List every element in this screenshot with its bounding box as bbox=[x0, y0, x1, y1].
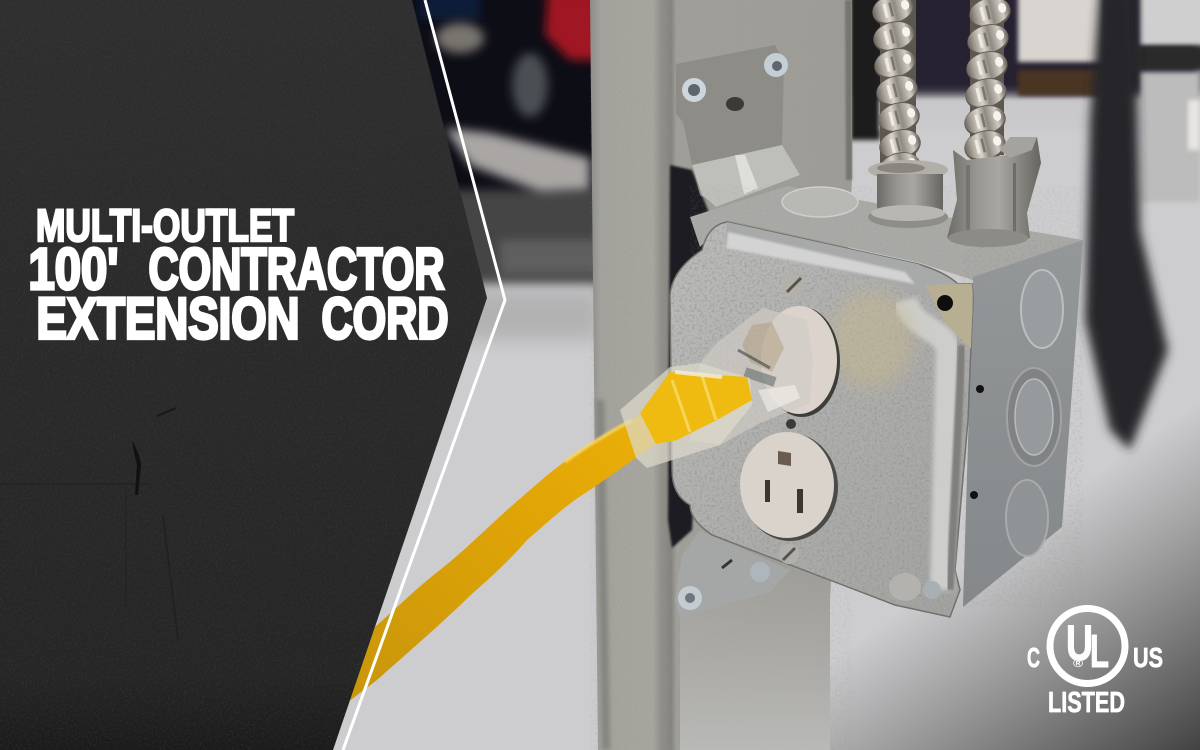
metal stud column bbox=[590, 0, 852, 750]
title text: CORD bbox=[322, 286, 448, 352]
junction box top face bbox=[690, 186, 1083, 280]
UL listed certification mark: LISTED bbox=[1048, 687, 1125, 719]
title text: CONTRACTOR bbox=[148, 237, 444, 302]
junction box side face with knockouts bbox=[963, 240, 1083, 607]
conduit connector, right bbox=[947, 137, 1041, 248]
UL listed certification mark: C bbox=[1027, 642, 1040, 673]
flexible metal conduit, left bbox=[869, 0, 924, 188]
title text: 100' bbox=[28, 237, 118, 302]
top mounting bracket bbox=[676, 45, 800, 207]
title text bbox=[28, 200, 448, 352]
dark title panel bbox=[0, 0, 500, 750]
conduit connector, left bbox=[868, 160, 948, 228]
UL listed certification mark: L bbox=[1090, 625, 1109, 677]
flexible metal conduit, right bbox=[961, 0, 1014, 166]
lower receptacle bbox=[740, 432, 838, 541]
UL listed certification mark: U bbox=[1066, 615, 1093, 671]
title text: MULTI-OUTLET bbox=[36, 200, 294, 251]
yellow cord bbox=[348, 415, 657, 702]
junction box cover plate bbox=[660, 210, 980, 630]
upper receptacle with clear plug bbox=[690, 306, 840, 445]
UL listed certification mark: ® bbox=[1073, 658, 1083, 670]
white chevron outline bbox=[343, 0, 505, 750]
clear strain relief over cord bbox=[620, 363, 752, 468]
UL listed certification mark: US bbox=[1133, 642, 1163, 673]
title text: EXTENSION bbox=[36, 286, 300, 352]
UL listed certification mark bbox=[1027, 608, 1163, 719]
bottom mounting bracket bbox=[675, 530, 790, 618]
